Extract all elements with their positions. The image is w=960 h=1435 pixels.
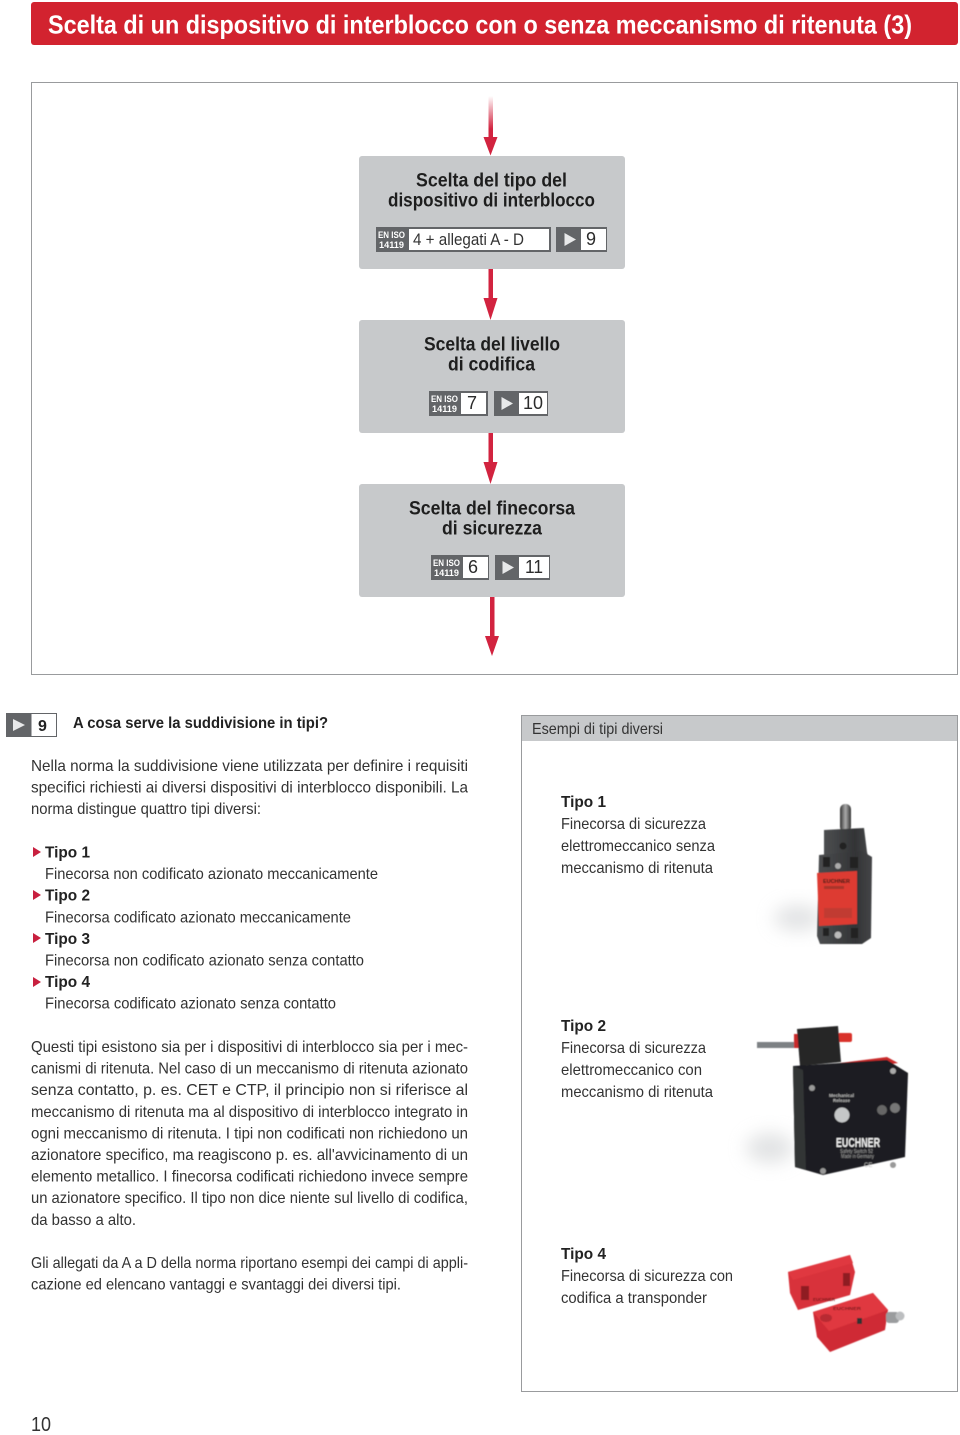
text: tipo 4: codifica a transponder (561, 1290, 708, 1307)
page reference badge: 9 (586, 229, 596, 249)
text block: explanation (31, 1039, 468, 1229)
page reference badge (556, 227, 607, 252)
product: tipo 4 transponder: EUCHNER (813, 1297, 836, 1302)
list of types: Finecorsa non codificato azionato senza contatto (45, 952, 364, 970)
standard reference badge: 4 + allegati A - D (413, 230, 524, 249)
product: tipo 4 transponder (788, 1255, 904, 1352)
text block: introduction (31, 758, 468, 818)
text block: explanation: elemento metallico. I finecorsa codificati richiedono invece sempre (31, 1169, 468, 1186)
text block: annexes: cazione ed elencano vantaggi e svantaggi dei diversi tipi. (31, 1276, 401, 1293)
text block: explanation: ogni meccanismo di ritenuta. I tipi non codificati non richiedono un (31, 1125, 468, 1142)
title bar (31, 2, 958, 45)
arrow: to finecorsa (484, 433, 498, 484)
standard reference badge: 14119 (434, 568, 459, 578)
panel header: Esempi di tipi diversi (532, 721, 663, 738)
text block: explanation: Questi tipi esistono sia per i dispositivi di interblocco sia per i mec- (31, 1039, 468, 1056)
flow box: tipo del dispositivo: Scelta del tipo del (416, 170, 567, 192)
section badge 9: 9 (38, 718, 47, 735)
flow box: finecorsa di sicurezza (359, 484, 625, 597)
flow box: livello di codifica: di codifica (448, 354, 535, 376)
section badge 9 (6, 713, 56, 737)
text: tipo 2: Tipo 2 (561, 1018, 606, 1035)
flow box: livello di codifica: Scelta del livello (424, 334, 560, 356)
list of types: Finecorsa codificato azionato senza contatto (45, 996, 336, 1013)
arrow: entry (484, 96, 498, 156)
text: tipo 2: Finecorsa di sicurezza (561, 1040, 706, 1057)
arrow: to codifica (484, 269, 498, 320)
standard reference badge (431, 555, 489, 580)
text: tipo 1 (561, 794, 715, 877)
list of types: Finecorsa codificato azionato meccanicamente (45, 909, 351, 926)
product: tipo 2 switch: Made in Germany (841, 1154, 874, 1160)
text: tipo 4: Tipo 4 (561, 1246, 606, 1263)
text: tipo 2: meccanismo di ritenuta (561, 1084, 713, 1101)
flow box: tipo del dispositivo: dispositivo di interblocco (388, 190, 595, 212)
page reference badge (494, 391, 548, 416)
product: tipo 2 switch: Mechanical (829, 1093, 854, 1098)
panel: examples of types (522, 716, 958, 1392)
product: tipo 2 switch (746, 1026, 908, 1175)
text block: explanation: un azionatore specifico. Il tipo non dice niente sul livello di codifica, (31, 1190, 468, 1207)
list of types: Finecorsa non codificato azionato meccanicamente (45, 866, 378, 883)
flow box: livello di codifica (359, 320, 625, 433)
page reference badge (495, 555, 550, 580)
flow box: finecorsa di sicurezza: di sicurezza (442, 518, 542, 540)
standard reference badge: 14119 (379, 240, 404, 250)
standard reference badge: EN ISO (433, 558, 460, 568)
text: tipo 4 (561, 1246, 733, 1307)
flow box: tipo del dispositivo (359, 156, 625, 269)
text block: explanation: canismi di ritenuta. Nel caso di un meccanismo di ritenuta azionato (31, 1061, 468, 1078)
text: tipo 1: Finecorsa di sicurezza (561, 816, 706, 833)
standard reference badge: EN ISO (378, 230, 405, 240)
product: tipo 2 switch: Safety Switch 52 (840, 1149, 873, 1155)
standard reference badge (376, 227, 551, 252)
standard reference badge: 7 (467, 393, 477, 413)
text block: introduction: specifici richiesti ai diversi dispositivi di interblocco disponibili. La (31, 780, 468, 797)
list of types: Tipo 3 (45, 931, 90, 948)
product: tipo 1 switch (774, 804, 872, 944)
panel header (522, 716, 957, 741)
section heading: A cosa serve la suddivisione in tipi? (73, 715, 328, 732)
text: tipo 1: Tipo 1 (561, 794, 606, 811)
text block: explanation: azionatore specifico, ma reagiscono p. es. all'avvicinamento di un (31, 1147, 468, 1164)
standard reference badge: 14119 (432, 404, 457, 414)
panel: flow chart frame (32, 82, 958, 674)
product: tipo 2 switch: EUCHNER (836, 1136, 880, 1150)
standard reference badge: EN ISO (431, 394, 458, 404)
list of types: Tipo 1 (45, 844, 90, 862)
standard reference badge: 6 (468, 557, 478, 577)
product: tipo 2 switch: CE (864, 1163, 872, 1169)
text block: annexes: Gli allegati da A a D della norma riportano esempi dei campi di appli- (31, 1255, 468, 1272)
text block: introduction: Nella norma la suddivisione viene utilizzata per definire i requisiti (31, 758, 468, 775)
text: tipo 1: elettromeccanico senza (561, 838, 715, 855)
product: tipo 1 switch: EUCHNER (823, 879, 850, 885)
product: tipo 2 switch: Release (833, 1098, 850, 1103)
text: tipo 2 (561, 1018, 713, 1101)
text: tipo 1: meccanismo di ritenuta (561, 860, 713, 877)
arrow: exit (485, 597, 499, 656)
page reference badge: 10 (523, 393, 543, 413)
product: tipo 4 transponder: EUCHNER (833, 1306, 862, 1311)
text: tipo 2: elettromeccanico con (561, 1062, 702, 1079)
list of types: Tipo 2 (45, 888, 90, 905)
text block: introduction: norma distingue quattro tipi diversi: (31, 801, 261, 818)
text block: explanation: da basso a alto. (31, 1212, 136, 1229)
text: tipo 4: Finecorsa di sicurezza con (561, 1268, 733, 1285)
page reference badge: 11 (525, 557, 543, 577)
list of types (33, 844, 378, 1013)
flow box: finecorsa di sicurezza: Scelta del finecorsa (409, 498, 575, 520)
list of types: Tipo 4 (45, 974, 90, 991)
text block: annexes (31, 1255, 468, 1293)
text block: explanation: meccanismo di ritenuta ma al dispositivo di interblocco integrato in (31, 1104, 468, 1121)
text block: explanation: senza contatto, p. es. CET e CTP, il principio non si riferisce al (31, 1082, 468, 1099)
standard reference badge (429, 391, 488, 416)
